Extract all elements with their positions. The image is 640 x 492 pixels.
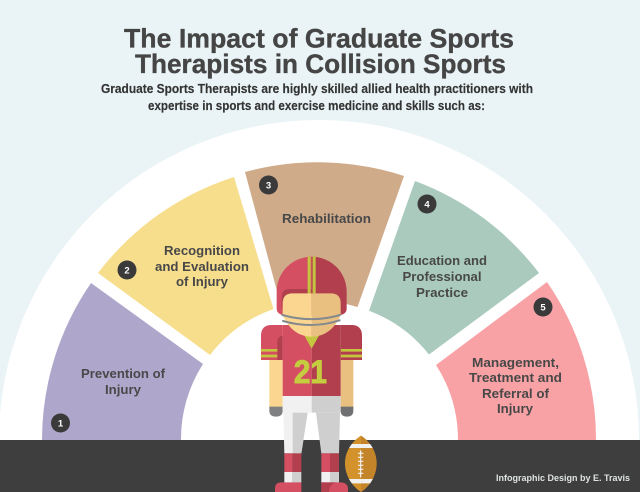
icon: football player: 21 xyxy=(294,354,327,390)
panel: rehabilitation: Rehabilitation xyxy=(282,211,371,226)
panel: recognition and evaluation of injury: and Evaluation xyxy=(155,259,249,274)
panel: prevention of injury xyxy=(42,283,203,440)
panel: education and professional practice xyxy=(369,181,539,354)
panel: education and professional practice: 4 xyxy=(424,200,430,210)
panel: recognition and evaluation of injury: of Injury xyxy=(176,274,229,289)
panel: education and professional practice: Professional xyxy=(402,269,482,284)
subtitle: Graduate Sports Therapists are highly skilled allied health practitioners with xyxy=(101,82,533,96)
panel: management, treatment and referral of injury: Treatment and xyxy=(469,370,562,385)
panel: recognition and evaluation of injury: 2 xyxy=(124,266,130,276)
panel: prevention of injury: Injury xyxy=(105,382,142,397)
panel: education and professional practice: Education and xyxy=(397,253,487,268)
panel: recognition and evaluation of injury: Recognition xyxy=(164,243,240,258)
credit: Infographic Design by E. Travis xyxy=(496,473,630,484)
title xyxy=(124,24,514,79)
panel: management, treatment and referral of injury: Referral of xyxy=(482,386,550,401)
icon: football player xyxy=(261,257,362,492)
panel: rehabilitation xyxy=(245,162,404,307)
title: The Impact of Graduate Sports xyxy=(124,24,514,54)
ground bar xyxy=(0,440,640,492)
panel: management, treatment and referral of injury: Management, xyxy=(472,355,559,370)
panel: management, treatment and referral of injury: Injury xyxy=(497,401,534,416)
panel: prevention of injury: 1 xyxy=(58,418,64,430)
panel: rehabilitation: 3 xyxy=(266,180,271,192)
subtitle: expertise in sports and exercise medicine and skills such as: xyxy=(148,99,485,113)
title: Therapists in Collision Sports xyxy=(135,49,506,79)
panel: education and professional practice: Practice xyxy=(416,285,468,300)
icon: football xyxy=(343,436,378,492)
panel: prevention of injury: Prevention of xyxy=(81,366,166,381)
panel: recognition and evaluation of injury xyxy=(98,177,274,355)
panel: management, treatment and referral of injury xyxy=(436,282,596,440)
panel: management, treatment and referral of injury: 5 xyxy=(540,302,546,314)
white semicircle backdrop xyxy=(0,120,639,440)
subtitle xyxy=(101,82,533,113)
